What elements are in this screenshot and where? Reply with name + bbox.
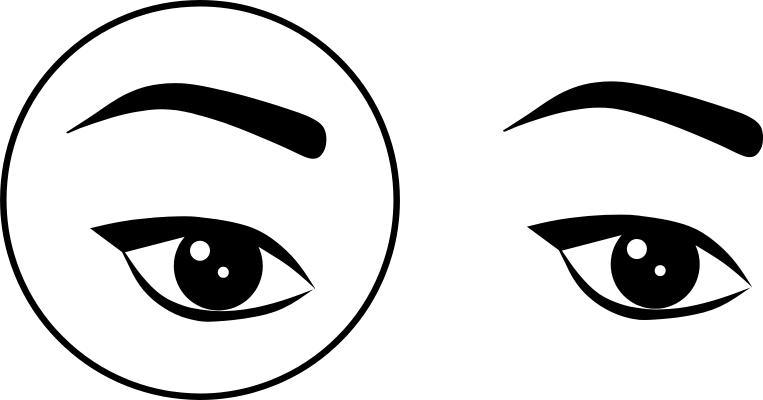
large highlight (627, 239, 647, 259)
right eyebrow (503, 81, 763, 157)
eyelid and eyeliner (527, 215, 752, 320)
large highlight (190, 241, 210, 261)
left eye (90, 216, 315, 322)
circle outline (3, 3, 397, 397)
iris (174, 222, 263, 310)
iris (611, 220, 700, 309)
eyelid and eyeliner (90, 216, 315, 322)
right eye (527, 215, 752, 320)
small highlight (655, 265, 666, 276)
left eyebrow (66, 83, 326, 159)
small highlight (218, 267, 229, 278)
